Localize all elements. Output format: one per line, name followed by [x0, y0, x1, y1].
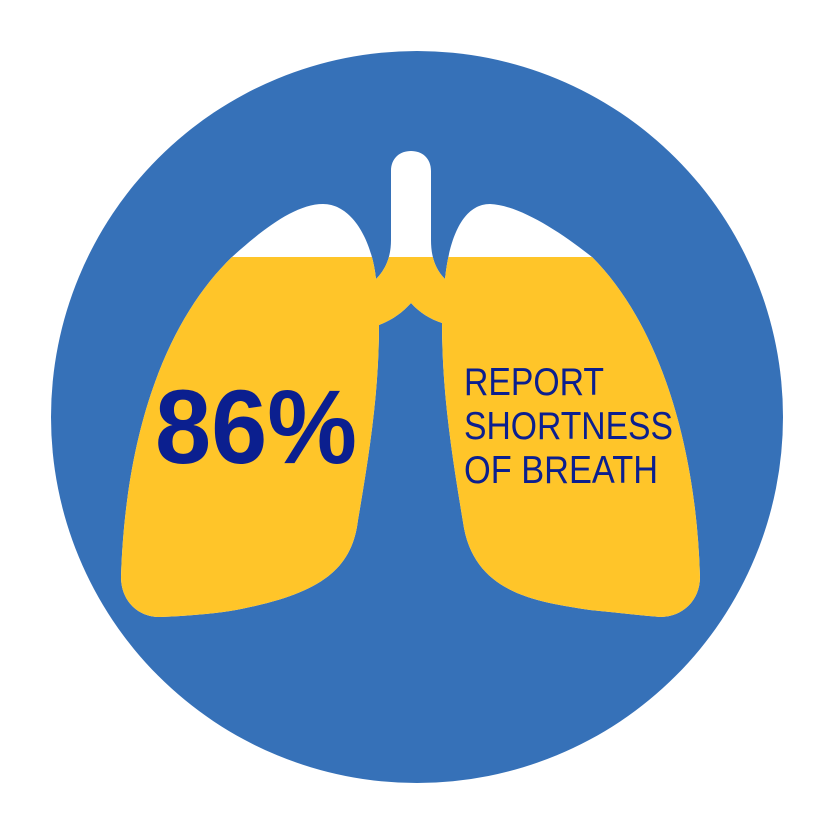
lungs empty portion and trachea	[121, 151, 700, 617]
infographic	[51, 51, 783, 783]
caption: report shortness of breath: REPORT	[464, 361, 604, 404]
blue circle background	[51, 51, 783, 783]
caption: report shortness of breath	[464, 361, 673, 492]
caption: report shortness of breath: SHORTNESS	[464, 405, 673, 448]
lungs filled portion	[121, 257, 700, 617]
statistic: 86%: 86%	[155, 369, 357, 486]
caption: report shortness of breath: OF BREATH	[464, 449, 658, 492]
icon: lungs filled to 86%	[121, 151, 700, 617]
